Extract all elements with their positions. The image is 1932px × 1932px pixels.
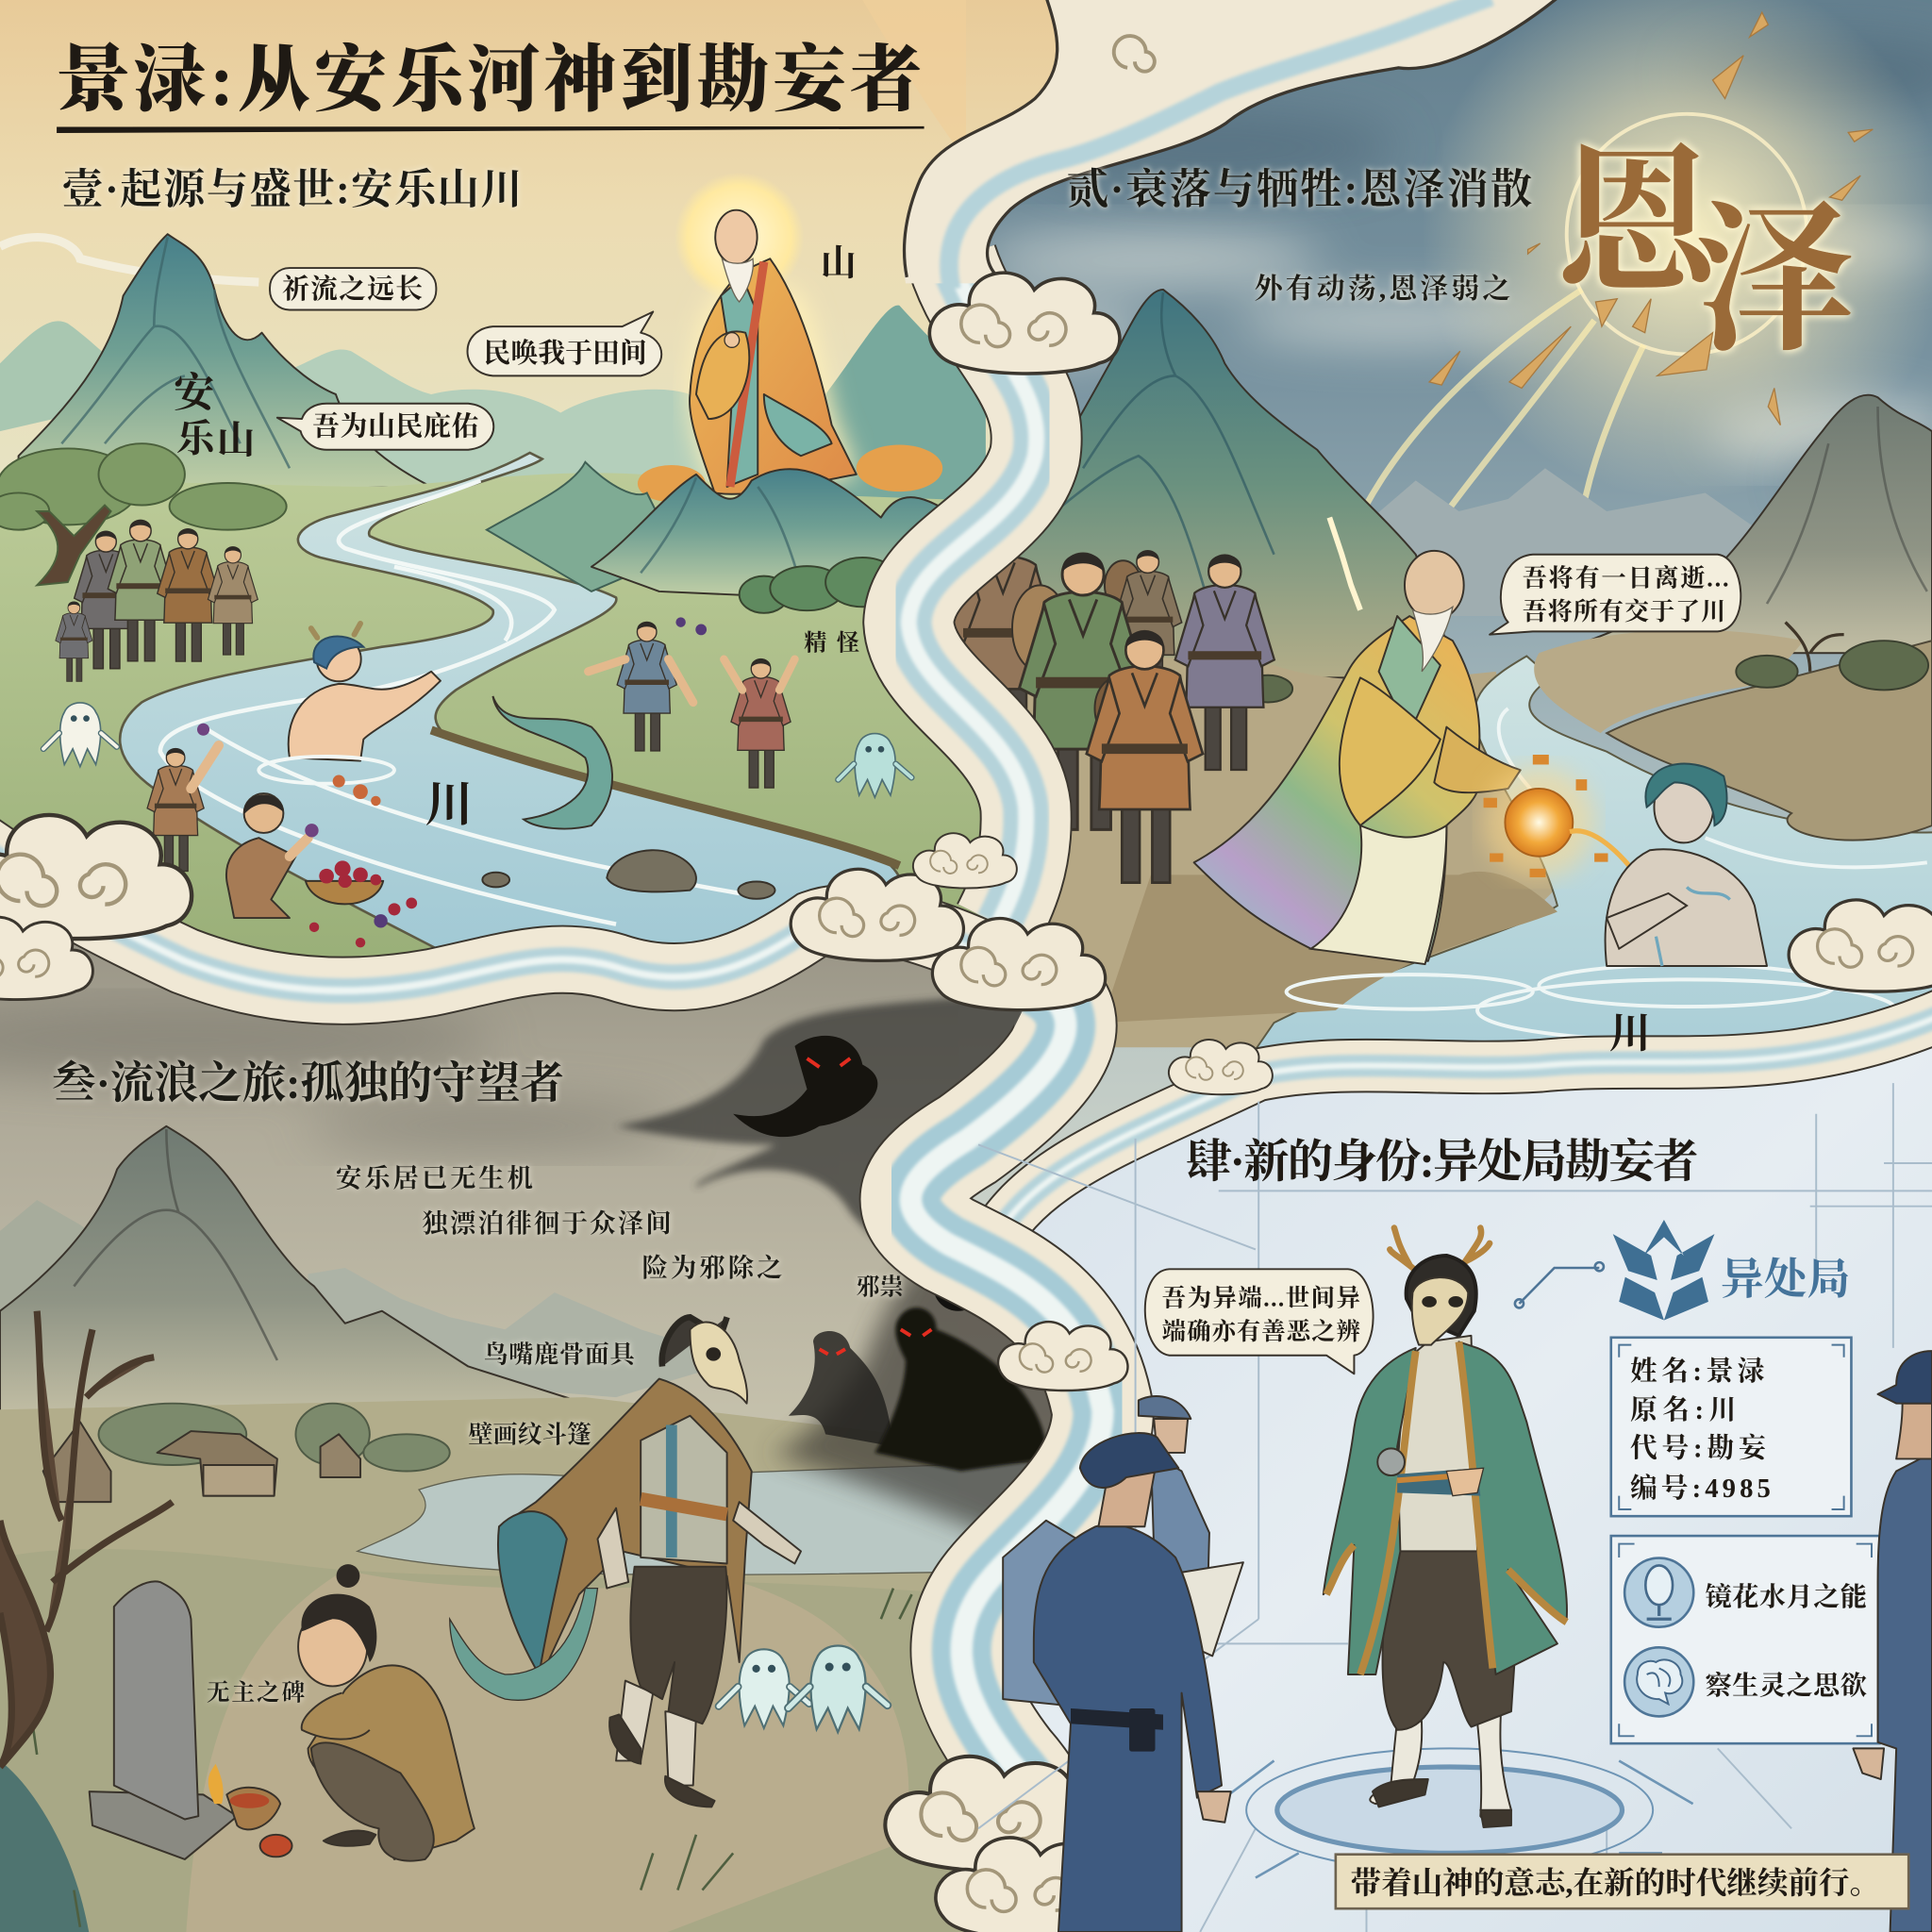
heading: section four: 肆·新的身份:异处局勘妄者	[1186, 1136, 1698, 1187]
captions: wandering narrative: 安乐居已无生机	[336, 1164, 533, 1192]
icon: grey mountain	[0, 1126, 585, 1416]
icon: mountain god	[675, 173, 857, 494]
speech bubble: old god's farewell: 吾将有一日离逝...	[1523, 565, 1728, 592]
icon: guards left	[1003, 1396, 1243, 1932]
icon: masked wanderer	[450, 1317, 801, 1807]
labels: place names: 山	[217, 419, 255, 461]
icon: kanwang standing figure	[1324, 1228, 1567, 1827]
scene: bureau interior	[978, 1083, 1932, 1932]
big glowing characters: 恩泽: 恩	[1556, 136, 1728, 314]
speech bubble: 民唤我于田间	[468, 311, 661, 375]
panel: abilities: 察生灵之思欲	[1706, 1671, 1867, 1701]
icon: central mountain	[1003, 290, 1458, 677]
icon: hills below the god	[487, 445, 966, 613]
icon: ruined village	[43, 1404, 450, 1502]
icon: floor magic circle	[1224, 1748, 1693, 1878]
scene: decline landscape	[905, 0, 1932, 1201]
icon: nameless stele	[90, 1581, 292, 1859]
speech bubble: 吾为异端: 端确亦有善恶之辨	[1162, 1318, 1360, 1345]
speech bubble: 民唤我于田间: 民唤我于田间	[484, 339, 647, 369]
panel: identity card: 原名:川	[1630, 1395, 1736, 1425]
speech bubble: 吾为山民庇佑	[277, 404, 493, 450]
panel: identity card: 编号:4985	[1630, 1474, 1771, 1504]
captions: wandering narrative: 壁画纹斗篷	[468, 1421, 591, 1448]
captions: wandering narrative	[207, 1164, 904, 1706]
icon: old mountain god with rainbow robe	[1194, 518, 1521, 964]
labels: place names: 川	[425, 779, 474, 832]
labels: place names: 山	[821, 243, 857, 283]
icon: lake	[356, 1461, 1028, 1575]
icon: kneeling child	[298, 1564, 475, 1861]
heading: section one: 壹·起源与盛世:安乐山川	[61, 166, 523, 213]
speech bubble: 吾为异端: 吾为异端...世间异	[1162, 1284, 1360, 1311]
big glowing characters: 恩泽: 泽	[1694, 193, 1856, 372]
panel: abilities: 镜花水月之能	[1706, 1582, 1867, 1612]
speech bubble: 吾为山民庇佑: 吾为山民庇佑	[312, 412, 478, 442]
captions: wandering narrative: 鸟嘴鹿骨面具	[484, 1341, 639, 1369]
icon: mirror	[1624, 1558, 1693, 1627]
icon: right mountain	[1557, 395, 1932, 653]
panel: identity card	[1611, 1338, 1851, 1516]
falling golden shards	[1429, 12, 1873, 425]
icon: young river god	[1606, 764, 1767, 966]
title: 景渌:从安乐河神到勘妄者	[57, 40, 923, 121]
banner: closing line	[1336, 1855, 1908, 1908]
speech bubble: 吾为异端	[1145, 1269, 1374, 1374]
panel: new identity background	[924, 1010, 1932, 1932]
icon: river rocks	[482, 850, 775, 899]
big glowing characters: 恩泽	[1556, 136, 1856, 372]
icon: brain	[1624, 1647, 1693, 1716]
speech bubble: 祈流之远长	[270, 268, 436, 309]
caption: 外有动荡,恩泽弱之: 外有动荡,恩泽弱之	[1255, 274, 1510, 305]
panel: abilities	[1611, 1536, 1879, 1743]
icon: river	[1151, 657, 1932, 1201]
icon: refugees	[949, 524, 1274, 883]
icon: Anle mountain	[19, 234, 431, 492]
icon: river god with tail	[258, 624, 612, 828]
captions: wandering narrative: 险为邪除之	[641, 1254, 782, 1282]
speech bubble: old god's farewell	[1490, 555, 1740, 635]
labels: place names: 乐	[176, 418, 218, 460]
captions: wandering narrative: 邪祟	[857, 1274, 904, 1301]
icon: water spirits	[719, 1646, 888, 1732]
heading: section three: 叁·流浪之旅:孤独的守望者	[52, 1059, 564, 1108]
icon: shrubs	[740, 558, 899, 613]
icon: guard right	[1853, 1351, 1932, 1932]
icon: bureau logo and connector	[1515, 1220, 1850, 1321]
panel: identity card: 姓名:景渌	[1630, 1357, 1765, 1387]
icon: tree cluster	[0, 443, 287, 585]
top cloud river band	[903, 0, 1558, 290]
scene: origin panel	[0, 0, 1109, 1010]
icon: dry shrubs	[1243, 641, 1928, 702]
icon: dark smoke and shadow creatures	[616, 991, 1109, 1582]
captions: wandering narrative: 无主之碑	[207, 1679, 305, 1706]
icon: running children	[589, 617, 794, 788]
icon: glowing orb with runes	[1484, 755, 1650, 893]
icon: sun glow and ring	[1348, 0, 1932, 555]
heading: section two: 贰·衰落与牺牲:恩泽消散	[1066, 166, 1532, 213]
banner: closing line: 带着山神的意志,在新的时代继续前行。	[1350, 1865, 1880, 1901]
icon: spirits	[43, 703, 911, 797]
icon: villagers	[56, 520, 258, 681]
scene: wandering panel	[0, 944, 1051, 1932]
icon: bureau logo and connector: 异处局	[1721, 1255, 1850, 1303]
speech bubble: old god's farewell: 吾将所有交于了川	[1523, 598, 1725, 625]
label: 川 in the river: 川	[1609, 1009, 1651, 1057]
labels: place names	[174, 243, 859, 832]
panel: identity card: 代号:勘妄	[1630, 1433, 1768, 1463]
icon: children throwing offerings	[147, 724, 417, 947]
labels: place names: 精怪	[804, 631, 859, 657]
speech bubble: 祈流之远长: 祈流之远长	[282, 275, 423, 305]
icon: winding river	[119, 451, 902, 947]
captions: wandering narrative: 独漂泊徘徊于众泽间	[422, 1209, 672, 1238]
labels: place names: 安	[174, 372, 216, 416]
icon: bare tree	[0, 1311, 173, 1767]
